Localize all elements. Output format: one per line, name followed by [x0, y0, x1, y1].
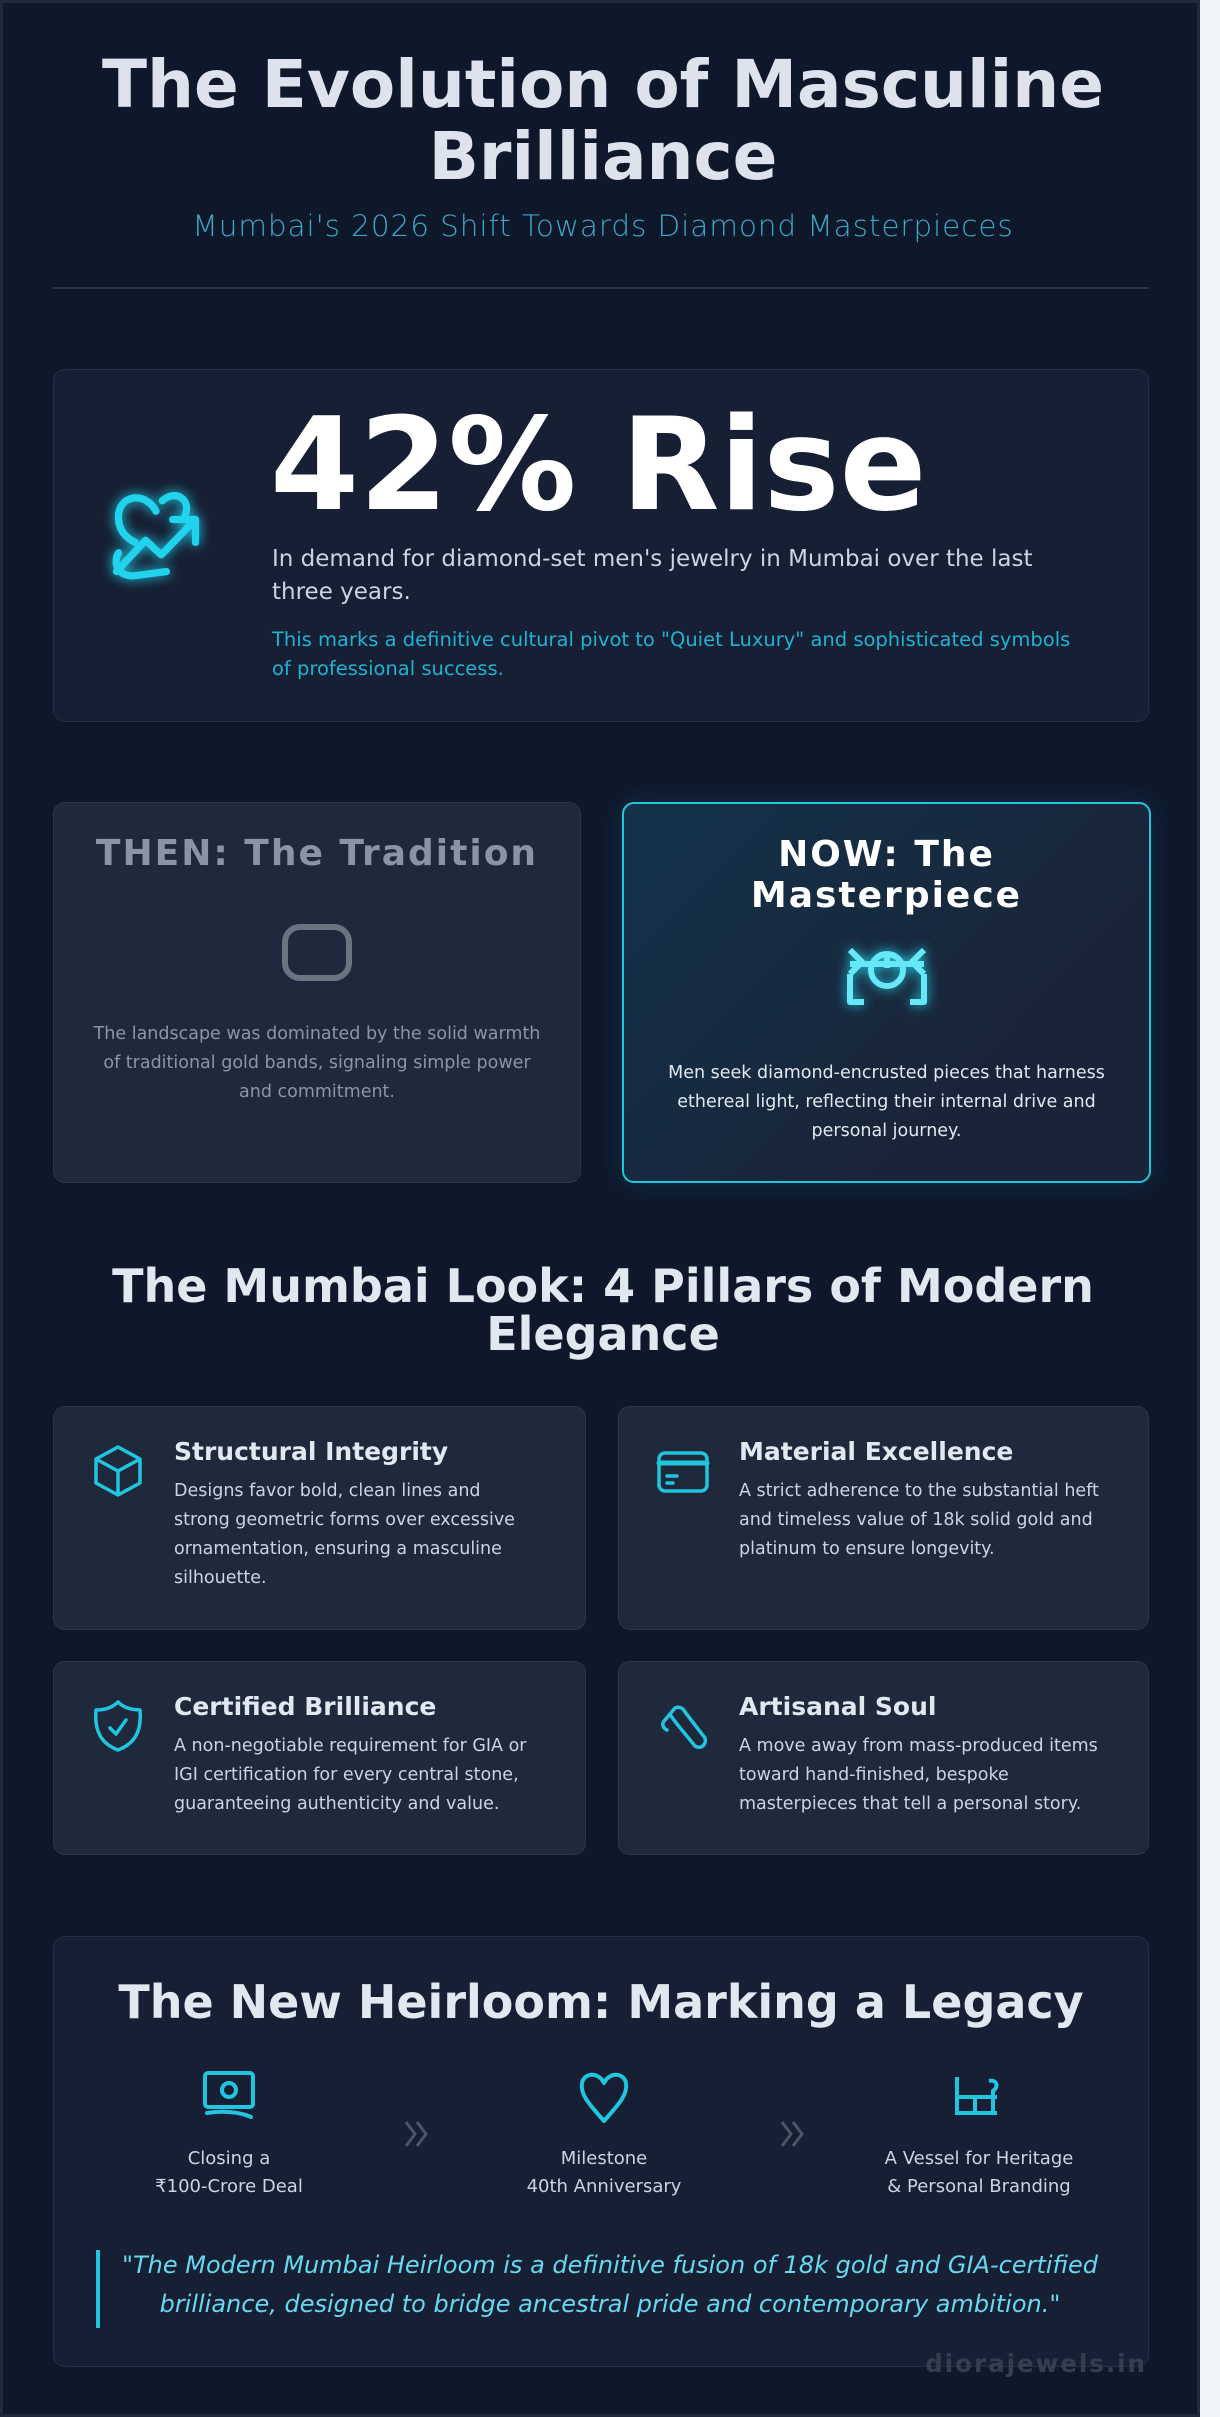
title: Artisanal Soul [739, 1692, 936, 1721]
icon: diamond ring [838, 942, 936, 1014]
big stat: 42% Rise [270, 391, 926, 540]
panel: then [53, 802, 581, 1183]
panel: stat [53, 369, 1149, 722]
watermark: diorajewels.in [925, 2349, 1147, 2378]
heading [751, 834, 1022, 916]
quote: "The Modern Mumbai Heirloom is a definitive fusion of 18k gold and GIA-certified brilliance, designed to bridge ancestral pride and contemporary ambition." [122, 2251, 1098, 2318]
heading: pillars: Elegance [486, 1307, 720, 1361]
note: This marks a definitive cultural pivot to "Quiet Luxury" and sophisticated symbols of professional success. [272, 628, 1070, 680]
text: A move away from mass-produced items toward hand-finished, bespoke masterpieces that tell a personal story. [739, 1736, 1098, 1814]
label: A Vessel for Heritage [885, 2148, 1073, 2169]
text: A non-negotiable requirement for GIA or IGI certification for every central stone, guaranteeing authenticity and value. [174, 1736, 526, 1814]
step: heritage [884, 2077, 1073, 2197]
panel: material excellence [618, 1406, 1149, 1630]
title: Brilliance [429, 118, 777, 195]
title: The Evolution of Masculine [102, 46, 1104, 123]
text: A strict adherence to the substantial heft and timeless value of 18k solid gold and platinum to ensure longevity. [739, 1481, 1099, 1559]
heading: pillars [112, 1259, 1094, 1361]
label [155, 2148, 303, 2197]
icon: tool [661, 1706, 708, 1749]
heading: NOW: The [778, 834, 995, 875]
label: & Personal Branding [887, 2176, 1071, 2197]
heading: THEN: The Tradition [96, 833, 538, 874]
title: Material Excellence [739, 1437, 1013, 1466]
icon: money [203, 2071, 255, 2120]
text: Designs favor bold, clean lines and strong geometric forms over excessive ornamentation, ensuring a masculine silhouette. [174, 1481, 515, 1588]
panel: heirloom [53, 1936, 1149, 2367]
panel: now [622, 802, 1151, 1183]
icon: card [656, 1451, 710, 1493]
icon: ring [282, 924, 352, 981]
label: 40th Anniversary [527, 2176, 681, 2197]
panel: certified brilliance [53, 1661, 586, 1855]
label: Milestone [561, 2148, 647, 2169]
heading: pillars: The Mumbai Look: 4 Pillars of Modern [112, 1259, 1094, 1313]
label: ₹100-Crore Deal [155, 2176, 303, 2197]
description: In demand for diamond-set men's jewelry in Mumbai over the last three years. [272, 546, 1033, 605]
icon: shield [94, 1700, 142, 1752]
title: Structural Integrity [174, 1437, 448, 1466]
subtitle: Mumbai's 2026 Shift Towards Diamond Masterpieces [192, 209, 1014, 243]
label: Closing a [188, 2148, 270, 2169]
label [527, 2148, 681, 2197]
arrow [781, 2121, 804, 2147]
icon: trend heart [104, 483, 209, 588]
text: The landscape was dominated by the solid warmth of traditional gold bands, signaling simple power and commitment. [94, 1024, 540, 1102]
step: deal [155, 2071, 303, 2197]
icon: heritage [955, 2077, 998, 2115]
icon: cube [94, 1445, 142, 1497]
panel: structural integrity [53, 1406, 586, 1630]
heading: Masterpiece [751, 875, 1022, 916]
label [884, 2148, 1073, 2197]
title: Certified Brilliance [174, 1692, 436, 1721]
icon: heart [580, 2072, 628, 2124]
heading: The New Heirloom: Marking a Legacy [118, 1975, 1084, 2029]
title [102, 46, 1104, 195]
step: milestone [527, 2072, 681, 2197]
arrow [405, 2121, 428, 2147]
panel: artisanal soul [618, 1661, 1149, 1855]
text: Men seek diamond-encrusted pieces that harness ethereal light, reflecting their internal drive and personal journey. [668, 1063, 1105, 1141]
